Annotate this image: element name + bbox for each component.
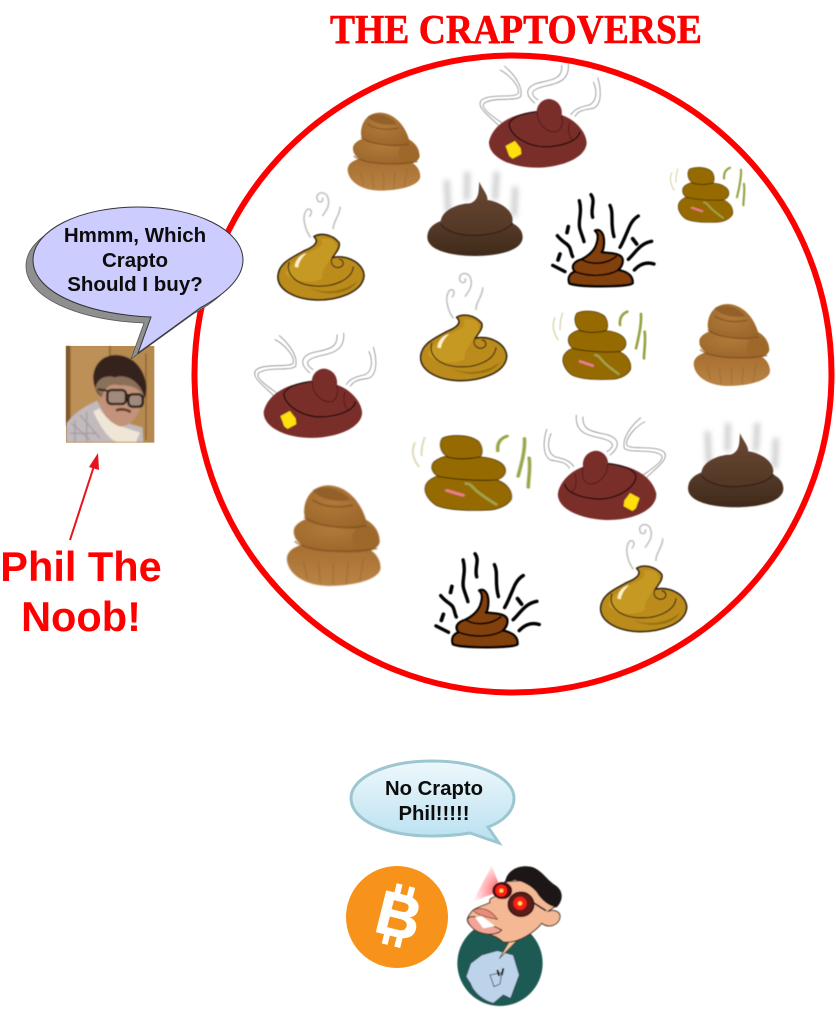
mouth bbox=[467, 917, 502, 934]
label: Phil The Noob: Noob! bbox=[21, 593, 141, 640]
icon: golden poop bottom right bbox=[601, 525, 687, 632]
speech bubble: Phil bbox=[26, 207, 243, 359]
laser glow bbox=[473, 866, 502, 902]
title: THE CRAPTOVERSE bbox=[330, 6, 702, 52]
panel: craptoverse circle bbox=[194, 56, 832, 692]
shirt bbox=[466, 951, 519, 1003]
speech bubble: No Crapto bbox=[351, 761, 514, 843]
bubble text: Should I buy? bbox=[67, 273, 203, 296]
bubble text: Crapto bbox=[102, 249, 168, 272]
bubble shadow bbox=[26, 213, 236, 359]
neck bbox=[499, 934, 523, 959]
bubble text: Hmmm, Which bbox=[64, 224, 206, 247]
label: Phil The Noob: Phil The bbox=[0, 543, 162, 590]
icon: cartoon stinky poop upper bbox=[553, 195, 654, 286]
icon: golden poop center bbox=[421, 274, 507, 381]
face bbox=[467, 880, 560, 942]
bubble body bbox=[33, 207, 243, 353]
photo: Phil the Noob bbox=[66, 346, 154, 443]
bubble text: Phil!!!!! bbox=[399, 803, 469, 825]
hair bbox=[505, 866, 562, 907]
icon: cartoon stinky poop bottom bbox=[436, 554, 539, 647]
icon: plush poop right bbox=[694, 304, 770, 386]
glasses bbox=[493, 883, 512, 899]
icon: maroon poop flipped bbox=[544, 415, 665, 520]
icon: stacked ochre poop center bbox=[553, 311, 645, 380]
icon: laser-eyed man bbox=[457, 866, 562, 1006]
icon: stacked ochre poop lower center bbox=[413, 436, 530, 510]
laser eyes bbox=[495, 885, 507, 897]
icon: bitcoin coin: B bbox=[369, 877, 429, 954]
icon: maroon poop left bbox=[255, 333, 376, 438]
icon: dark brown poop right bbox=[688, 423, 783, 507]
icon: golden poop upper left bbox=[278, 193, 364, 300]
icon: plush poop lower left bbox=[287, 485, 381, 586]
icon: plush poop top left bbox=[348, 113, 420, 191]
icon: stacked ochre poop top right bbox=[670, 167, 744, 222]
bubble text: No Crapto bbox=[385, 778, 483, 800]
teal badge bbox=[457, 921, 543, 1006]
icon: maroon poop top bbox=[480, 63, 600, 168]
icon: bitcoin coin bbox=[346, 866, 448, 968]
icon: dark brown poop upper center bbox=[427, 172, 523, 256]
arrow: points to Phil bbox=[70, 453, 99, 540]
